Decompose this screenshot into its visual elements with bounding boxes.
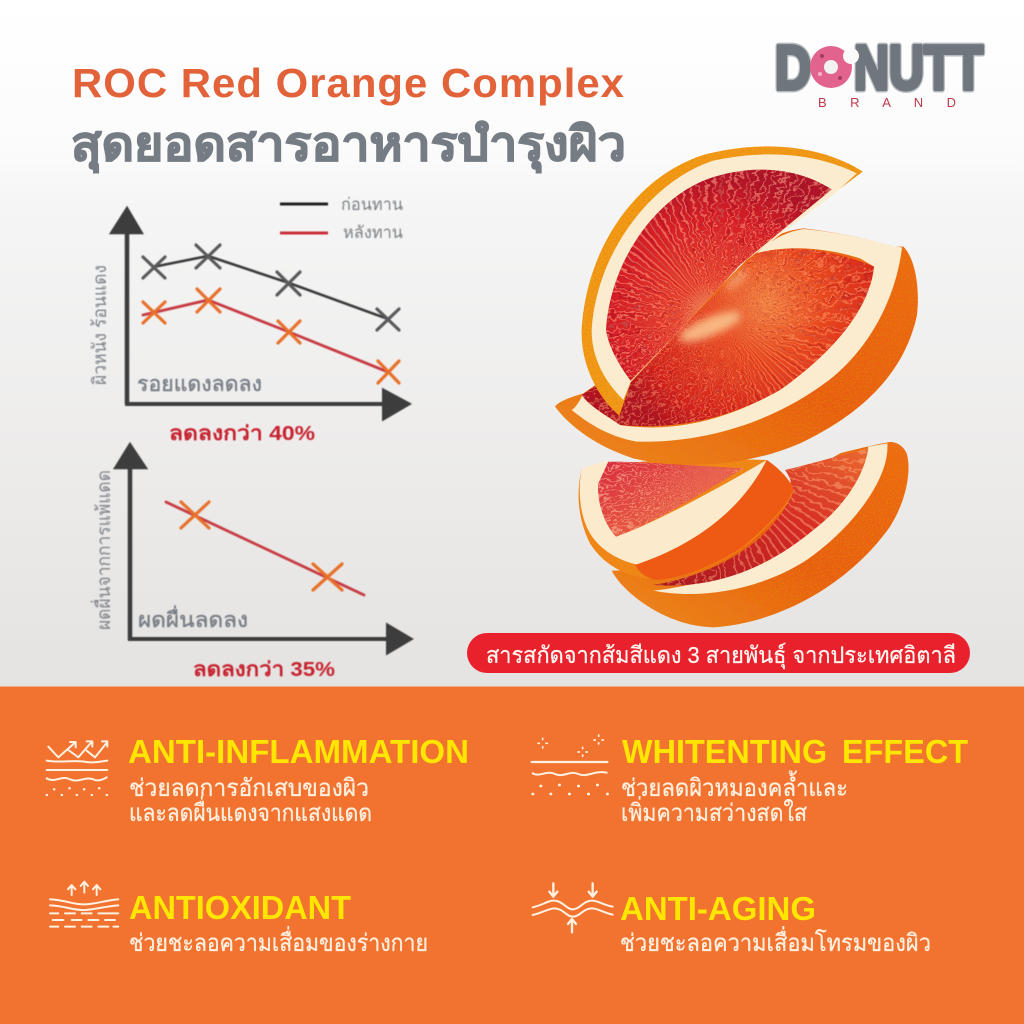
slice: large wedge xyxy=(555,220,918,465)
logo: Donutt Brand: D xyxy=(775,34,811,103)
label: ANTI-INFLAMMATION xyxy=(128,733,469,770)
description: ช่วยชะลอความเสื่อมโทรมของผิว xyxy=(620,926,931,957)
fruit core xyxy=(676,267,751,348)
slice: top half round xyxy=(582,146,863,417)
panel: light background xyxy=(0,0,1024,687)
description xyxy=(129,775,372,827)
label: ANTIOXIDANT xyxy=(129,889,351,926)
x axis with arrow xyxy=(128,626,410,652)
logo: Donutt Brand: B R A N D xyxy=(818,95,956,110)
logo: Donutt Brand: D xyxy=(775,34,811,103)
callout: red orange origin xyxy=(467,633,970,673)
logo: Donutt Brand: NUTT xyxy=(854,34,983,103)
legend xyxy=(280,195,403,242)
benefit: whitening effect xyxy=(532,733,968,827)
icon: bitten pink donut xyxy=(810,46,859,88)
label: ANTI-AGING xyxy=(620,890,816,927)
description: และลดผื่นแดงจากแสงแดด xyxy=(129,796,372,827)
chart: sun rash reduction xyxy=(90,446,410,681)
y axis label: ผิวหนัง ร้อนแดง xyxy=(90,265,111,385)
slice: front lower wedge xyxy=(578,460,794,580)
logo: Donutt Brand xyxy=(775,34,983,110)
panel: orange benefits band xyxy=(0,686,1024,1024)
description: ช่วยชะลอความเสื่อมของร่างกาย xyxy=(129,926,428,957)
icon: wave with compress arrows xyxy=(533,883,613,932)
y axis label: ผดผื่นจากการแพ้แดด xyxy=(90,470,115,630)
description: ช่วยลดผิวหมองคล้ำและ xyxy=(621,770,848,802)
slice: back lower wedge xyxy=(612,442,908,628)
result: 40%: ลดลงกว่า 40% xyxy=(169,423,315,445)
legend: ก่อนทาน xyxy=(341,195,403,214)
benefit: anti-inflammation xyxy=(47,733,469,827)
chart note: ผดผื่นลดลง xyxy=(138,605,248,632)
before line xyxy=(143,245,399,330)
callout: red orange origin: สารสกัดจากส้มสีแดง 3 สายพันธุ์ จากประเทศอิตาลี xyxy=(486,642,956,669)
chart: redness before and after xyxy=(90,195,408,445)
chart note: รอยแดงลดลง xyxy=(137,373,262,396)
heading: Thai subtitle: สุดยอดสารอาหารบำรุงผิว xyxy=(71,117,626,173)
title: ROC Red Orange Complex: ROC Red Orange Complex xyxy=(72,60,625,106)
after line xyxy=(143,289,399,383)
description: เพิ่มความสว่างสดใส xyxy=(621,796,807,827)
description: ช่วยลดการอักเสบของผิว xyxy=(129,775,369,802)
benefit: anti-aging xyxy=(533,883,931,957)
logo: Donutt Brand: NUTT xyxy=(854,34,983,103)
x axis with arrow xyxy=(125,391,408,418)
icon: skin with sparkles xyxy=(532,735,608,794)
y axis with arrow xyxy=(117,446,144,640)
illustration: blood orange slices xyxy=(555,146,918,627)
icon: skin with rising arrows xyxy=(47,741,107,795)
icon: skin layers with up arrows xyxy=(50,882,118,927)
legend: หลังทาน xyxy=(343,223,403,242)
benefit: antioxidant xyxy=(50,882,428,957)
label: WHITENTING EFFECT xyxy=(622,733,968,770)
result: 35%: ลดลงกว่า 35% xyxy=(193,659,335,681)
trend line xyxy=(166,502,364,595)
y axis with arrow xyxy=(113,210,140,404)
description xyxy=(621,770,848,827)
